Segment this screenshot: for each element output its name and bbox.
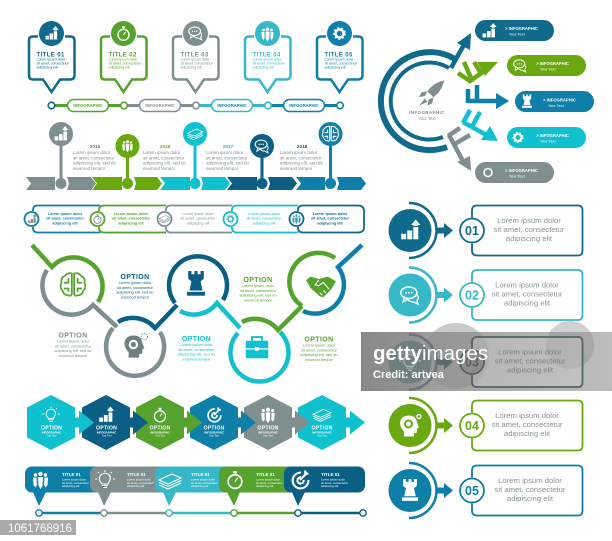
- card: title 03: sit amet, consectetur: [180, 62, 214, 66]
- option text: grey: eiusmod tempor: [59, 353, 88, 358]
- timeline with infographic pills: INFOGRAPHIC: [289, 103, 319, 108]
- hexagon icons: [42, 406, 331, 423]
- option text: grey: adipiscing elit, sed do: [54, 348, 92, 353]
- image id tag: 1061768916: [8, 523, 72, 535]
- panel: numbered row 01: sit amet, consectetur: [494, 225, 565, 234]
- hexagon labels: INFOGRAPHIC: [42, 430, 61, 434]
- title bar text: sit amet, consectetur: [191, 481, 218, 485]
- pill 4: [507, 127, 586, 148]
- card: title 02: sit amet, consectetur: [108, 62, 142, 66]
- panel: numbered row 05: Lorem ipsum dolor: [498, 476, 562, 485]
- option text: green upper: eiusmod tempor: [244, 297, 273, 302]
- hexagon labels: Your Text: [102, 434, 112, 438]
- icon: head with gears: [124, 333, 148, 358]
- panel: linked text cards: [24, 206, 364, 232]
- card: title 03: Lorem ipsum dolor: [180, 58, 210, 62]
- watermark text: [373, 342, 488, 381]
- hexagon labels: OPTION: [203, 426, 225, 432]
- arrow: green: [458, 62, 498, 81]
- option text: teal: eiusmod tempor: [183, 356, 211, 361]
- rings: [381, 52, 455, 150]
- pill 3: Your Text: [548, 104, 565, 108]
- pill 3: > INFOGRAPHIC: [543, 98, 576, 102]
- year texts: Lorem ipsum dolor: [206, 150, 244, 155]
- winding connector arcs: [32, 245, 362, 381]
- year texts: sit amet, consectetur: [206, 155, 248, 160]
- panel: numbered row 03: Lorem ipsum dolor: [498, 348, 562, 356]
- title bar text: Lorem ipsum dolor: [127, 478, 151, 482]
- pill 2: [507, 55, 586, 76]
- pill 3: [515, 91, 594, 112]
- pin: 2015: [49, 122, 73, 189]
- card: title 04: [245, 21, 290, 92]
- panel: numbered row 03: adipiscing elit: [507, 366, 554, 374]
- option text: green lower: sit amet, consectetur: [301, 347, 338, 352]
- card: title 01: sit amet, consectetur: [36, 62, 70, 66]
- timeline with infographic pills: [48, 100, 343, 112]
- card: title 05: [317, 21, 362, 92]
- card: title 03: [173, 21, 218, 92]
- title bar text: [62, 472, 348, 488]
- panel: numbered row 03: [388, 334, 582, 390]
- card: title 04: Lorem ipsum dolor: [252, 58, 282, 62]
- pin: 2016: [116, 134, 140, 189]
- hexagon labels: Your Text: [155, 434, 165, 438]
- hexagon labels: Your Text: [209, 434, 219, 438]
- option text: grey: OPTION: [58, 332, 88, 340]
- option text: teal: OPTION: [182, 336, 211, 343]
- title bar text: TITLE 01: [127, 472, 146, 477]
- linked card 4: Lorem ipsum dolor: [248, 212, 280, 216]
- linked card 2: sit amet, consectetur: [112, 217, 151, 221]
- linked card 2: Lorem ipsum dolor: [114, 212, 148, 216]
- pill 1: > INFOGRAPHIC: [505, 26, 538, 31]
- option text: green upper: sit amet, consectetur: [240, 288, 277, 293]
- card: title 02: Lorem ipsum dolor: [108, 58, 138, 62]
- card: title 04: sit amet, consectetur: [252, 62, 286, 66]
- hexagon labels: OPTION: [41, 426, 62, 432]
- card: title 02: TITLE 02: [108, 52, 137, 58]
- title bar text: adipiscing elit: [321, 484, 339, 488]
- option text: top left: sit amet, consectetur: [117, 285, 154, 290]
- linked card 2: [90, 206, 166, 232]
- card: title 03: adipiscing elit: [180, 66, 202, 70]
- pill 5: [475, 162, 554, 183]
- year texts: 2016: [160, 144, 171, 150]
- option text: top left: eiusmod tempor: [121, 294, 150, 299]
- arrow: blue: [468, 85, 509, 109]
- year texts: sit amet, consectetur: [280, 155, 322, 160]
- option text: green upper: adipiscing elit, sed do: [239, 293, 277, 298]
- pill 1: [475, 20, 554, 41]
- panel: winding option circles: [32, 245, 362, 381]
- option text: teal: sit amet, consectetur: [179, 347, 215, 352]
- icon: handshake: [306, 277, 336, 297]
- year texts: sit amet, consectetur: [73, 155, 115, 160]
- option text: green lower: adipiscing elit, sed do: [300, 352, 338, 357]
- year texts: 2017: [223, 144, 234, 150]
- card: title 02: adipiscing elit: [108, 66, 130, 70]
- pill 1: Your Text: [509, 32, 526, 36]
- panel: numbered row 03: 03: [465, 356, 479, 370]
- title bar icons: [33, 470, 308, 489]
- hexagon labels: INFOGRAPHIC: [204, 430, 224, 434]
- option text: green lower: Lorem ipsum dolor: [303, 342, 336, 348]
- year texts: Lorem ipsum dolor: [280, 150, 318, 155]
- hexagon labels: Your Text: [47, 434, 57, 438]
- card: title 04: TITLE 04: [252, 52, 281, 58]
- card: title 05: sit amet, consectetur: [324, 62, 358, 66]
- card: title 05: Lorem ipsum dolor: [324, 58, 354, 62]
- panel: numbered row 05: [388, 463, 582, 518]
- option text: green lower: OPTION: [304, 336, 334, 344]
- panel: numbered row 05: adipiscing elit: [507, 494, 554, 503]
- option text: green upper: Lorem ipsum dolor: [242, 283, 275, 288]
- card: title 02: [101, 21, 146, 92]
- linked card 1: Lorem ipsum dolor: [48, 212, 82, 216]
- option text: green lower: [300, 336, 338, 362]
- panel: numbered row 01: 01: [465, 224, 479, 238]
- option text: teal: adipiscing elit, sed do: [178, 352, 215, 357]
- title bar text: adipiscing elit: [127, 484, 145, 488]
- linked card 3: sit amet, consectetur: [180, 217, 216, 221]
- pin: 2019: [318, 122, 342, 189]
- option text: top left: adipiscing elit, sed do: [116, 290, 154, 295]
- panel: numbered row 04: adipiscing elit: [504, 429, 551, 438]
- panel: numbered row 05: 05: [465, 484, 479, 498]
- icon: brain: [61, 273, 85, 296]
- option text: top left: OPTION: [120, 274, 150, 281]
- option text: top left: [116, 274, 154, 299]
- linked card 5: Lorem ipsum dolor: [313, 212, 347, 216]
- chevron bar: [26, 177, 366, 190]
- icon: rocket: [419, 80, 444, 106]
- hexagon labels: OPTION: [311, 426, 333, 432]
- title bar text: TITLE 01: [62, 472, 81, 477]
- linked card 3: Lorem ipsum dolor: [182, 212, 214, 216]
- year texts: adipiscing elit, sed do: [143, 161, 187, 166]
- panel: numbered row 01: [388, 203, 582, 258]
- panel: numbered row 01: adipiscing elit: [506, 234, 553, 243]
- icon: briefcase: [246, 337, 268, 358]
- linked card 4: [224, 206, 298, 232]
- watermark text: Credit: artvea: [373, 369, 445, 381]
- title bar text: TITLE 01: [191, 472, 210, 477]
- hexagon labels: INFOGRAPHIC: [97, 430, 116, 434]
- title bar text: adipiscing elit: [191, 484, 209, 488]
- year texts: [73, 144, 324, 171]
- year texts: Lorem ipsum dolor: [73, 150, 111, 155]
- year texts: eiusmod tempor: [206, 166, 239, 171]
- pill 4: Your Text: [540, 140, 557, 144]
- hexagon labels: OPTION: [96, 426, 117, 432]
- title bar text: sit amet, consectetur: [62, 481, 89, 485]
- year texts: Lorem ipsum dolor: [143, 150, 181, 155]
- panel: chevron year timeline: [26, 122, 366, 190]
- card: title 04: adipiscing elit: [252, 66, 274, 70]
- hexagon labels: Your Text: [317, 434, 327, 438]
- hexagon labels: [41, 426, 333, 438]
- panel: numbered row 04: 04: [465, 419, 479, 433]
- hexagon labels: OPTION: [149, 426, 171, 432]
- option text: grey: Lorem ipsum dolor: [57, 338, 90, 344]
- year texts: eiusmod tempor: [143, 166, 176, 171]
- icon: chess rook: [187, 271, 205, 296]
- title bar text: TITLE 01: [321, 472, 340, 477]
- year texts: eiusmod tempor: [280, 166, 313, 171]
- panel: numbered row 02: 02: [465, 288, 479, 302]
- title bar text: TITLE 01: [256, 472, 275, 477]
- title bar text: Lorem ipsum dolor: [191, 478, 215, 482]
- panel: numbered row 02: adipiscing elit: [504, 298, 551, 308]
- year texts: adipiscing elit, sed do: [280, 161, 324, 166]
- linked card 5: sit amet, consectetur: [311, 217, 350, 221]
- pin: 2017: [183, 122, 207, 189]
- option text: green lower: eiusmod tempor: [305, 357, 334, 362]
- option text: grey: [54, 332, 92, 358]
- card: title 05: adipiscing elit: [324, 66, 346, 70]
- panel: numbered row 02: Lorem ipsum dolor: [495, 280, 559, 290]
- timeline with infographic pills: INFOGRAPHIC: [73, 103, 103, 108]
- title bar text: Lorem ipsum dolor: [256, 478, 280, 482]
- title bar text: Lorem ipsum dolor: [62, 478, 86, 482]
- title bar text: Lorem ipsum dolor: [321, 478, 345, 482]
- hexagon labels: Your Text: [263, 434, 273, 438]
- center label: Your Text: [418, 116, 436, 121]
- linked card 3: [158, 206, 232, 232]
- arrow: dark blue: [451, 33, 471, 68]
- panel: numbered row 02: sit amet, consectetur: [492, 290, 563, 298]
- watermark band background: [361, 321, 612, 391]
- linked card 1: adipiscing elit: [52, 221, 78, 225]
- title bar text: sit amet, consectetur: [256, 481, 283, 485]
- panel: numbered row 04: sit amet, consectetur: [492, 420, 563, 429]
- year texts: adipiscing elit, sed do: [73, 161, 117, 166]
- option text: teal: [178, 336, 215, 361]
- center label: [409, 110, 445, 121]
- linked card 2: adipiscing elit: [118, 221, 144, 225]
- bottom timeline: [36, 510, 366, 516]
- panel: numbered row 04: Lorem ipsum dolor: [495, 411, 559, 420]
- linked card 4: adipiscing elit: [253, 221, 276, 225]
- watermark text: gettyimages: [373, 342, 488, 365]
- card: title 01: adipiscing elit: [36, 66, 58, 70]
- hexagon labels: INFOGRAPHIC: [150, 430, 170, 434]
- panel: radial rocket arrows: [381, 20, 594, 183]
- center label: INFOGRAPHIC: [409, 110, 445, 115]
- linked card 5: adipiscing elit: [317, 221, 343, 225]
- option text: green upper: OPTION: [243, 277, 273, 284]
- panel: numbered row 04: [388, 398, 582, 453]
- card: title 01: [29, 21, 74, 92]
- hexagon labels: INFOGRAPHIC: [258, 430, 278, 434]
- panel: numbered row 03: sit amet, consectetur: [495, 356, 566, 366]
- panel: numbered row 02: [388, 268, 582, 322]
- image id tag: [0, 520, 76, 535]
- linked card 1: sit amet, consectetur: [46, 217, 85, 221]
- title bar text: adipiscing elit: [62, 484, 80, 488]
- linked card 5: [290, 206, 364, 232]
- panel: numbered row 01: Lorem ipsum dolor: [497, 216, 561, 225]
- linked card 3: adipiscing elit: [187, 221, 210, 225]
- arrow: grey: [448, 128, 471, 171]
- card: title 01: Lorem ipsum dolor: [36, 58, 66, 62]
- panel: title bars with timeline: [25, 466, 366, 516]
- card: title 05: TITLE 05: [324, 52, 353, 58]
- option text: grey: sit amet, consectetur: [55, 343, 92, 348]
- timeline with infographic pills: INFOGRAPHIC: [217, 103, 247, 108]
- pill 5: > INFOGRAPHIC: [505, 168, 538, 173]
- year texts: 2015: [90, 144, 101, 150]
- panel: title cards row: [29, 21, 362, 92]
- pill 2: Your Text: [540, 68, 557, 72]
- year texts: adipiscing elit, sed do: [206, 161, 250, 166]
- year texts: sit amet, consectetur: [143, 155, 185, 160]
- hexagon labels: OPTION: [257, 426, 279, 432]
- card: title 03: TITLE 03: [180, 52, 209, 58]
- option text: green upper: [239, 277, 277, 302]
- pill 5: Your Text: [509, 174, 526, 178]
- year texts: 2018: [297, 144, 308, 150]
- pill 4: > INFOGRAPHIC: [536, 133, 569, 138]
- option text: top left: Lorem ipsum dolor: [119, 280, 152, 285]
- option text: teal: Lorem ipsum dolor: [180, 342, 213, 347]
- card: title 01: TITLE 01: [36, 52, 65, 58]
- linked card 4: sit amet, consectetur: [246, 217, 282, 221]
- title bar text: sit amet, consectetur: [321, 481, 348, 485]
- arrow: teal: [463, 110, 498, 141]
- title bar text: adipiscing elit: [256, 484, 274, 488]
- pin: 2018: [250, 134, 274, 189]
- title bar text: sit amet, consectetur: [127, 481, 154, 485]
- pill 2: > INFOGRAPHIC: [536, 61, 569, 66]
- panel: numbered row 05: sit amet, consectetur: [495, 485, 566, 494]
- year texts: eiusmod tempor: [73, 166, 106, 171]
- panel: hexagon process: [27, 395, 365, 450]
- hexagon labels: INFOGRAPHIC: [312, 430, 332, 434]
- linked card 1: [24, 206, 100, 232]
- timeline with infographic pills: INFOGRAPHIC: [145, 103, 175, 108]
